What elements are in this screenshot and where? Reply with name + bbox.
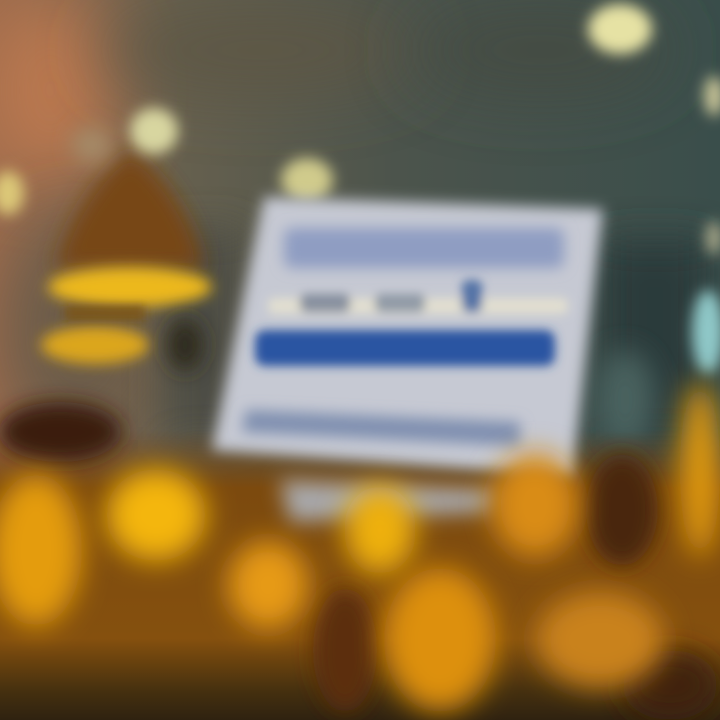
text line: top heading xyxy=(284,228,564,268)
text line: middle row xyxy=(268,280,568,314)
text line: blue highlighted band xyxy=(255,330,555,366)
text line: lower band xyxy=(242,410,520,446)
icon: hanging lamp xyxy=(41,150,212,371)
bokeh lights: upper xyxy=(0,4,720,374)
bokeh lights: lower amber xyxy=(0,382,720,712)
panel: blurred sign xyxy=(212,197,603,522)
bottom band: dark amber floor xyxy=(0,402,720,720)
